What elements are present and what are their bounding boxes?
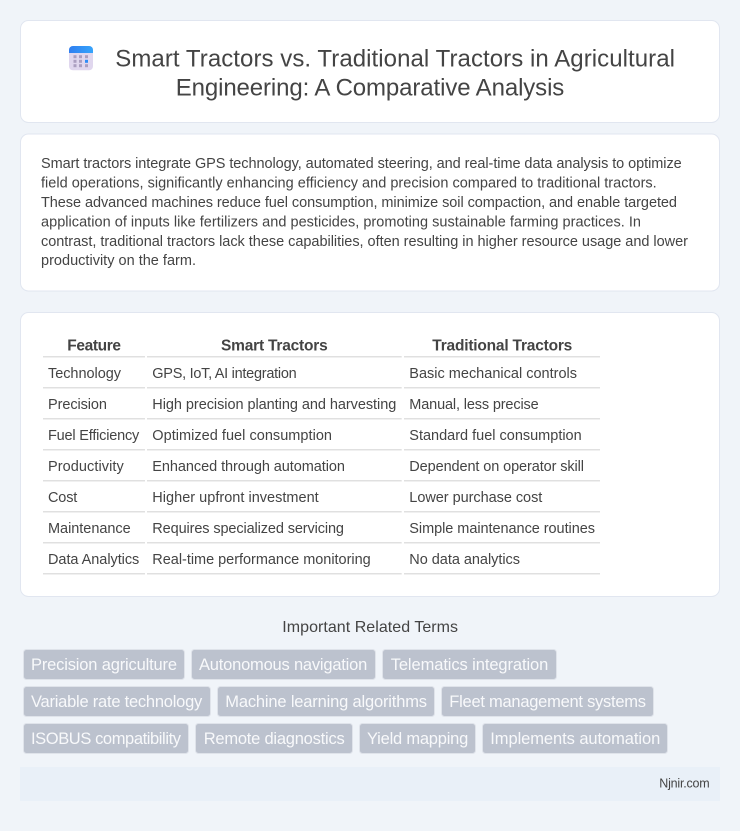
tag: Precision agriculture xyxy=(24,650,184,680)
tag: Machine learning algorithms xyxy=(218,686,434,716)
tag: Implements automation: Implements automation xyxy=(490,730,660,748)
panel: comparison table xyxy=(20,312,720,596)
table row: Data Analytics: No data analytics xyxy=(409,552,520,568)
table row: Cost: Lower purchase cost xyxy=(409,490,542,506)
tag: Remote diagnostics: Remote diagnostics xyxy=(204,730,345,748)
title xyxy=(115,46,675,102)
table row: Technology: GPS, IoT, AI integration xyxy=(152,366,297,382)
text block: introduction: productivity on the farm. xyxy=(41,253,196,269)
table row: Precision: Manual, less precise xyxy=(409,397,539,413)
tag: Precision agriculture: Precision agriculture xyxy=(31,656,177,674)
tag: Variable rate technology xyxy=(24,686,210,716)
table row: Productivity: Productivity xyxy=(48,459,124,475)
tag: Autonomous navigation: Autonomous navigation xyxy=(199,656,367,674)
panel: introduction paragraph xyxy=(20,134,720,291)
tag: Implements automation xyxy=(482,724,668,754)
tag: Yield mapping: Yield mapping xyxy=(367,730,468,748)
table row: Technology xyxy=(43,366,600,388)
tag: Yield mapping xyxy=(360,724,476,754)
table row: Fuel Efficiency: Optimized fuel consumption xyxy=(152,428,332,444)
text block: introduction xyxy=(41,156,688,269)
tag: Telematics integration xyxy=(382,650,556,680)
table row: Technology: Technology xyxy=(48,366,122,382)
title: Engineering: A Comparative Analysis xyxy=(176,75,564,102)
tag: Variable rate technology: Variable rate technology xyxy=(31,693,203,711)
table row: Data Analytics: Data Analytics xyxy=(48,552,139,568)
text block: introduction: Smart tractors integrate GPS technology, automated steering, and real-time data analysis to optimize xyxy=(41,156,682,172)
table row: Maintenance xyxy=(43,521,600,544)
tag: ISOBUS compatibility: ISOBUS compatibility xyxy=(31,730,182,748)
table row: Precision xyxy=(43,397,600,420)
panel: related term tags xyxy=(24,650,668,754)
table row: Maintenance: Requires specialized servicing xyxy=(152,521,344,537)
table row: Precision: Precision xyxy=(48,397,107,413)
tag: Fleet management systems xyxy=(442,686,654,716)
table row: Fuel Efficiency xyxy=(43,428,600,450)
table row: Data Analytics: Real-time performance monitoring xyxy=(152,552,371,568)
text block: introduction: application of inputs like fertilizers and pesticides, promoting sustainable farming practices. In xyxy=(41,214,641,230)
table row: Cost: Higher upfront investment xyxy=(152,490,319,506)
table header row: Smart Tractors xyxy=(221,338,328,355)
table row: Technology: Basic mechanical controls xyxy=(409,366,577,382)
table row: Precision: High precision planting and harvesting xyxy=(152,397,396,413)
table row: Productivity xyxy=(43,459,600,482)
tag: ISOBUS compatibility xyxy=(24,724,188,754)
text block: introduction: These advanced machines reduce fuel consumption, minimize soil compaction, and enable targeted xyxy=(41,195,677,211)
panel: header xyxy=(20,20,720,122)
table header row: Feature xyxy=(67,338,121,355)
heading: important related terms: Important Related Terms xyxy=(282,619,458,636)
table row: Fuel Efficiency: Standard fuel consumption xyxy=(409,428,582,444)
table row: Cost xyxy=(43,490,600,512)
tag: Remote diagnostics xyxy=(196,724,352,754)
table header row xyxy=(43,338,600,358)
table row: Productivity: Enhanced through automation xyxy=(152,459,345,475)
tag: Machine learning algorithms: Machine learning algorithms xyxy=(225,693,427,711)
tag: Fleet management systems: Fleet management systems xyxy=(449,693,646,711)
icon: calendar xyxy=(69,46,93,70)
table row: Fuel Efficiency: Fuel Efficiency xyxy=(48,428,140,444)
text block: introduction: field operations, significantly enhancing efficiency and precision compared to traditional tractors. xyxy=(41,176,657,192)
table row: Maintenance: Simple maintenance routines xyxy=(409,521,595,537)
table row: Data Analytics xyxy=(43,552,600,574)
table row: Productivity: Dependent on operator skill xyxy=(409,459,584,475)
table row: Maintenance: Maintenance xyxy=(48,521,131,537)
footer xyxy=(20,767,720,801)
tag: Telematics integration: Telematics integration xyxy=(391,656,548,674)
title: Smart Tractors vs. Traditional Tractors in Agricultural xyxy=(115,46,675,73)
tag: Autonomous navigation xyxy=(192,650,376,680)
table header row: Traditional Tractors xyxy=(432,338,572,355)
text block: introduction: contrast, traditional tractors lack these capabilities, often resulting in higher resource usage and lower xyxy=(41,234,688,250)
footer source label: Njnir.com xyxy=(659,777,710,791)
table row: Cost: Cost xyxy=(48,490,77,506)
